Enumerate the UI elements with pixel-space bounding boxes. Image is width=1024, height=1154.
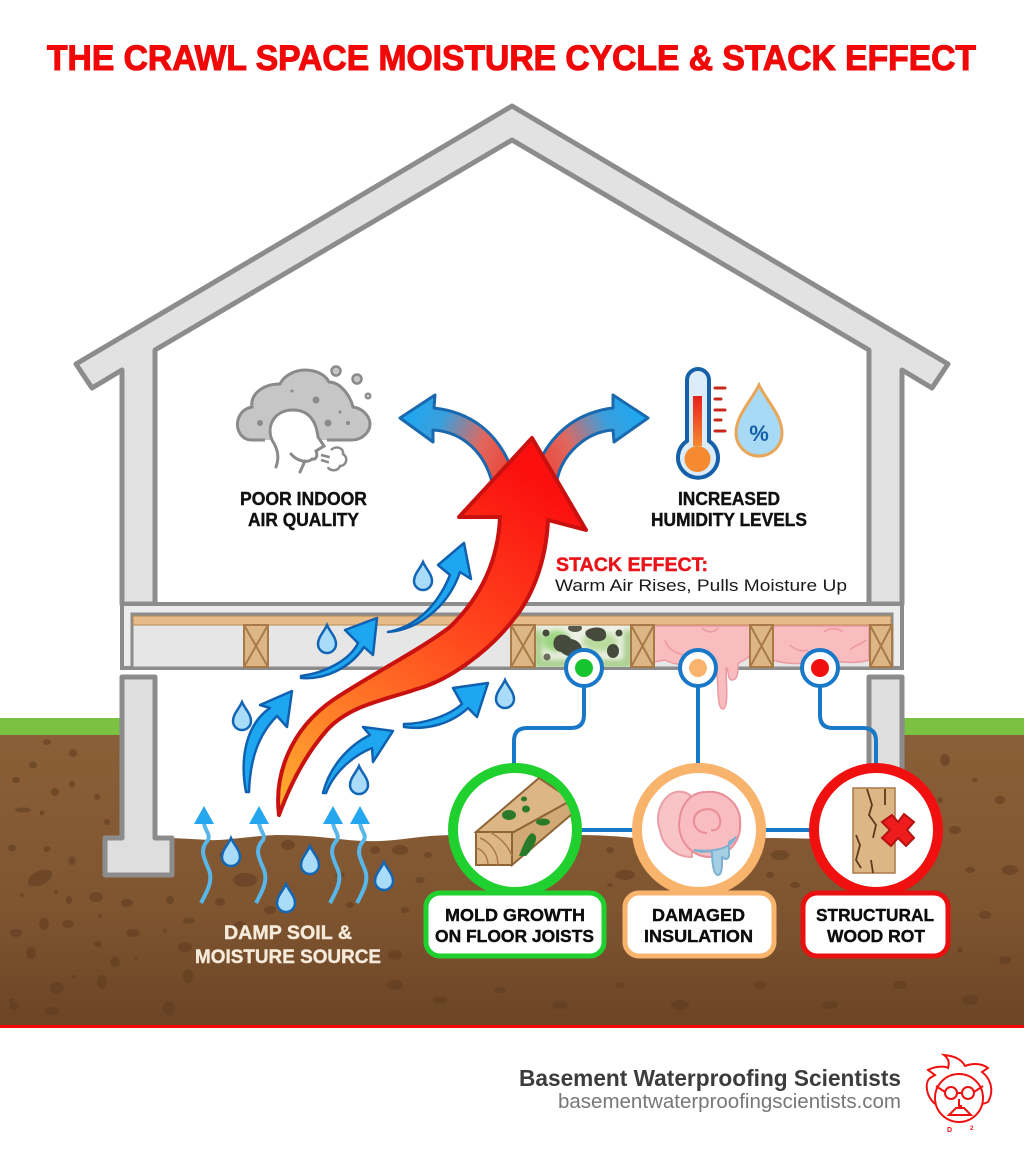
arrow: left branch to indoor air bbox=[400, 395, 512, 500]
arrow: big stack effect warm air bbox=[278, 438, 586, 815]
mold patch between joists bbox=[536, 624, 630, 667]
footer brand text bbox=[519, 1065, 901, 1113]
pink insulation with drips bbox=[654, 626, 869, 709]
footer brand text: Basement Waterproofing Scientists bbox=[519, 1065, 901, 1091]
circle callout: structural wood rot bbox=[814, 768, 938, 892]
title: THE CRAWL SPACE MOISTURE CYCLE & STACK EFFECT bbox=[47, 38, 976, 78]
label box: damaged insulation bbox=[625, 893, 774, 956]
logo: scientist face: 2 bbox=[970, 1126, 974, 1132]
label: poor indoor air quality: POOR INDOOR bbox=[240, 489, 367, 509]
label: poor indoor air quality: AIR QUALITY bbox=[248, 510, 359, 530]
label box: mold growth on floor joists: MOLD GROWTH bbox=[445, 905, 585, 925]
marker: insulation bbox=[680, 650, 716, 686]
house: lower foundation walls and footing bbox=[105, 677, 902, 875]
label: increased humidity levels: INCREASED bbox=[678, 489, 780, 509]
label box: damaged insulation: DAMAGED bbox=[652, 905, 745, 925]
label box: structural wood rot: WOOD ROT bbox=[827, 926, 925, 946]
ground: soil and grass bbox=[0, 675, 1024, 1025]
circle callout: mold on joist bbox=[453, 768, 577, 892]
humidity icon: thermometer and droplet bbox=[678, 369, 782, 478]
label: damp soil and moisture source: MOISTURE SOURCE bbox=[195, 946, 381, 968]
stack effect text: STACK EFFECT: bbox=[556, 555, 708, 576]
marker: wood rot bbox=[802, 650, 838, 686]
logo: scientist face bbox=[927, 1055, 991, 1134]
rising moisture arrows bbox=[244, 543, 488, 793]
logo: scientist face: D bbox=[947, 1127, 952, 1134]
stack effect text: Warm Air Rises, Pulls Moisture Up bbox=[555, 577, 847, 595]
marker: mold bbox=[566, 650, 602, 686]
label box: damaged insulation: INSULATION bbox=[644, 926, 753, 946]
label: increased humidity levels: HUMIDITY LEVELS bbox=[651, 510, 807, 530]
soil speckles bbox=[8, 739, 1018, 1015]
arrow: right branch to humidity bbox=[540, 395, 648, 500]
label: increased humidity levels bbox=[651, 489, 807, 530]
humidity icon: thermometer and droplet: % bbox=[749, 421, 769, 446]
label: damp soil and moisture source bbox=[195, 922, 381, 968]
water droplets bbox=[222, 562, 514, 912]
stack effect text bbox=[555, 555, 847, 595]
circle callout: damaged insulation bbox=[637, 768, 761, 892]
label box: mold growth on floor joists: ON FLOOR JOISTS bbox=[435, 926, 594, 946]
house: roof and upper walls bbox=[76, 106, 948, 604]
red divider band bbox=[0, 1025, 1024, 1028]
label box: mold growth on floor joists bbox=[426, 893, 604, 956]
floor system bbox=[122, 604, 902, 668]
wavy vapor arrows from soil bbox=[194, 806, 370, 903]
label box: structural wood rot: STRUCTURAL bbox=[816, 905, 934, 925]
air quality icon: cloud and person bbox=[238, 366, 370, 472]
connector lines bbox=[514, 680, 876, 830]
floor joists bbox=[244, 625, 892, 667]
label: poor indoor air quality bbox=[240, 489, 367, 530]
label box: structural wood rot bbox=[803, 893, 948, 956]
footer brand text: basementwaterproofingscientists.com bbox=[558, 1091, 901, 1113]
label: damp soil and moisture source: DAMP SOIL & bbox=[224, 922, 352, 944]
